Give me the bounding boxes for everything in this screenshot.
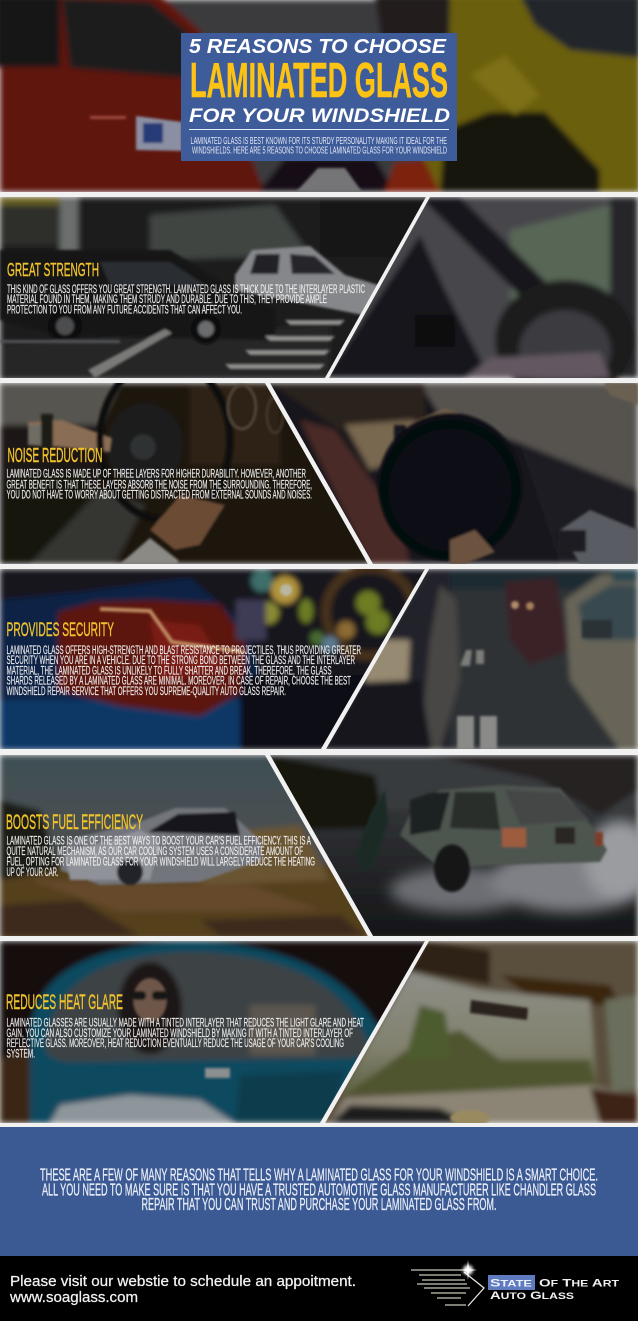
heading: GREAT STRENGTH (7, 260, 99, 280)
body text: YOU DO NOT HAVE TO WORRY ABOUT GETTING DISTRACTED FROM EXTERNAL SOUNDS AND NOISES. (6, 490, 312, 502)
body text (6, 1018, 364, 1060)
panel: reduces heat glare (0, 941, 638, 1126)
photo: tail light and bokeh (0, 568, 430, 750)
photo: street traffic (0, 197, 430, 380)
panel: conclusion (0, 1127, 638, 1256)
call to action (9, 1273, 356, 1306)
logo wordmark: A UTO G LASS (490, 1290, 574, 1302)
panel: boosts fuel efficiency: BOOSTS FUEL EFFICIENCY (6, 811, 143, 834)
panel: noise reduction (0, 383, 638, 564)
heading: NOISE REDUCTION (8, 445, 102, 467)
divider (321, 569, 429, 749)
footer (0, 1256, 638, 1321)
body text: GREAT BENEFIT IS THAT THESE LAYERS ABSORB THE NOISE FROM THE SURROUNDING. THEREFORE, (6, 480, 312, 492)
body text (6, 468, 312, 502)
divider (265, 383, 373, 564)
logo wordmark: S TATE (490, 1278, 532, 1290)
body text: GAIN. YOU CAN ALSO CUSTOMIZE YOUR LAMINATED WINDSHIELD BY MAKING IT WITH A TINTED INTERLAYER OF (6, 1028, 353, 1040)
divider (325, 197, 430, 378)
logo wordmark: O F T HE A RT (539, 1278, 620, 1290)
panel: provides security (0, 568, 638, 750)
headline line 1: 5 REASONS TO CHOOSE (189, 36, 447, 58)
body text: FUEL, OPTING FOR LAMINATED GLASS FOR YOUR WINDSHIELD WILL LARGELY REDUCE THE HEATING (6, 856, 315, 868)
call to action: Please visit our webstie to schedule an appoitment. (10, 1273, 356, 1290)
title box (181, 33, 457, 161)
photo: vintage car interior (320, 941, 638, 1126)
body text: REFLECTIVE GLASS. MOREOVER, HEAT REDUCTION EVENTUALLY REDUCE THE USAGE OF YOUR CAR'S COOLING (6, 1038, 344, 1050)
photo: driver seat view (329, 197, 638, 378)
panel: great strength (0, 197, 638, 378)
body text: LAMINATED GLASS IS MADE UP OF THREE LAYERS FOR HIGHER DURABILITY. HOWEVER, ANOTHER (6, 468, 306, 480)
photo: woman in blue car (0, 941, 430, 1123)
body text (6, 836, 315, 879)
divider (320, 941, 429, 1123)
body text (6, 645, 361, 698)
conclusion text (40, 1164, 598, 1214)
panel: reduces heat glare: REDUCES HEAT GLARE (6, 991, 123, 1014)
heading: PROVIDES SECURITY (6, 620, 114, 641)
logo: State of the Art Auto Glass (411, 1260, 620, 1306)
body text: SECURITY WHEN YOU ARE IN A VEHICLE. DUE TO THE STRONG BOND BETWEEN THE GLASS AND THE INTERLAYER (6, 655, 355, 667)
icon: speed lines and chevron (411, 1260, 484, 1306)
body text: LAMINATED GLASS IS ONE OF THE BEST WAYS TO BOOST YOUR CAR'S FUEL EFFICIENCY. THIS IS A (6, 836, 311, 848)
photo: driver at the wheel (265, 383, 638, 564)
body text: SYSTEM. (6, 1048, 35, 1060)
body text: PROTECTION TO YOU FROM ANY FUTURE ACCIDENTS THAT CAN AFFECT YOU. (7, 304, 242, 316)
photo: hands on steering wheel (0, 383, 368, 564)
photo: traffic jam (320, 569, 638, 750)
call to action: www.soaglass.com (9, 1289, 138, 1306)
header banner (0, 0, 638, 192)
body text: WINDSHIELD REPAIR SERVICE THAT OFFERS YOU SUPREME-QUALITY AUTO GLASS REPAIR. (6, 686, 286, 698)
panel: boosts fuel efficiency (0, 755, 638, 940)
body text: SHARDS RELEASED BY A LAMINATED GLASS ARE MINIMAL. MOREOVER, IN CASE OF REPAIR, CHOOSE THE BEST (6, 676, 351, 688)
divider (265, 755, 373, 936)
intro text (190, 136, 447, 156)
body text: QUITE NATURAL MECHANISM, AS OUR CAR COOLING SYSTEM USES A CONSIDERATE AMOUNT OF (6, 846, 303, 858)
logo wordmark (490, 1278, 620, 1302)
photo: car burnout (265, 755, 638, 940)
body text: MATERIAL, THE LAMINATED GLASS IS UNLIKELY TO FULLY SHATTER AND BREAK. THEREFORE, THE GLASS (6, 666, 332, 678)
headline line 3: FOR YOUR WINDSHIELD (189, 105, 450, 127)
header photo: crashed cars (0, 0, 638, 192)
body text: UP OF YOUR CAR. (6, 867, 58, 879)
body text: MATERIAL FOUND IN THEM, MAKING THEM STRUDY AND DURABLE. DUE TO THIS, THEY PROVIDE AMPLE (7, 294, 327, 306)
photo: white car in desert (0, 755, 370, 940)
body text (7, 284, 365, 316)
